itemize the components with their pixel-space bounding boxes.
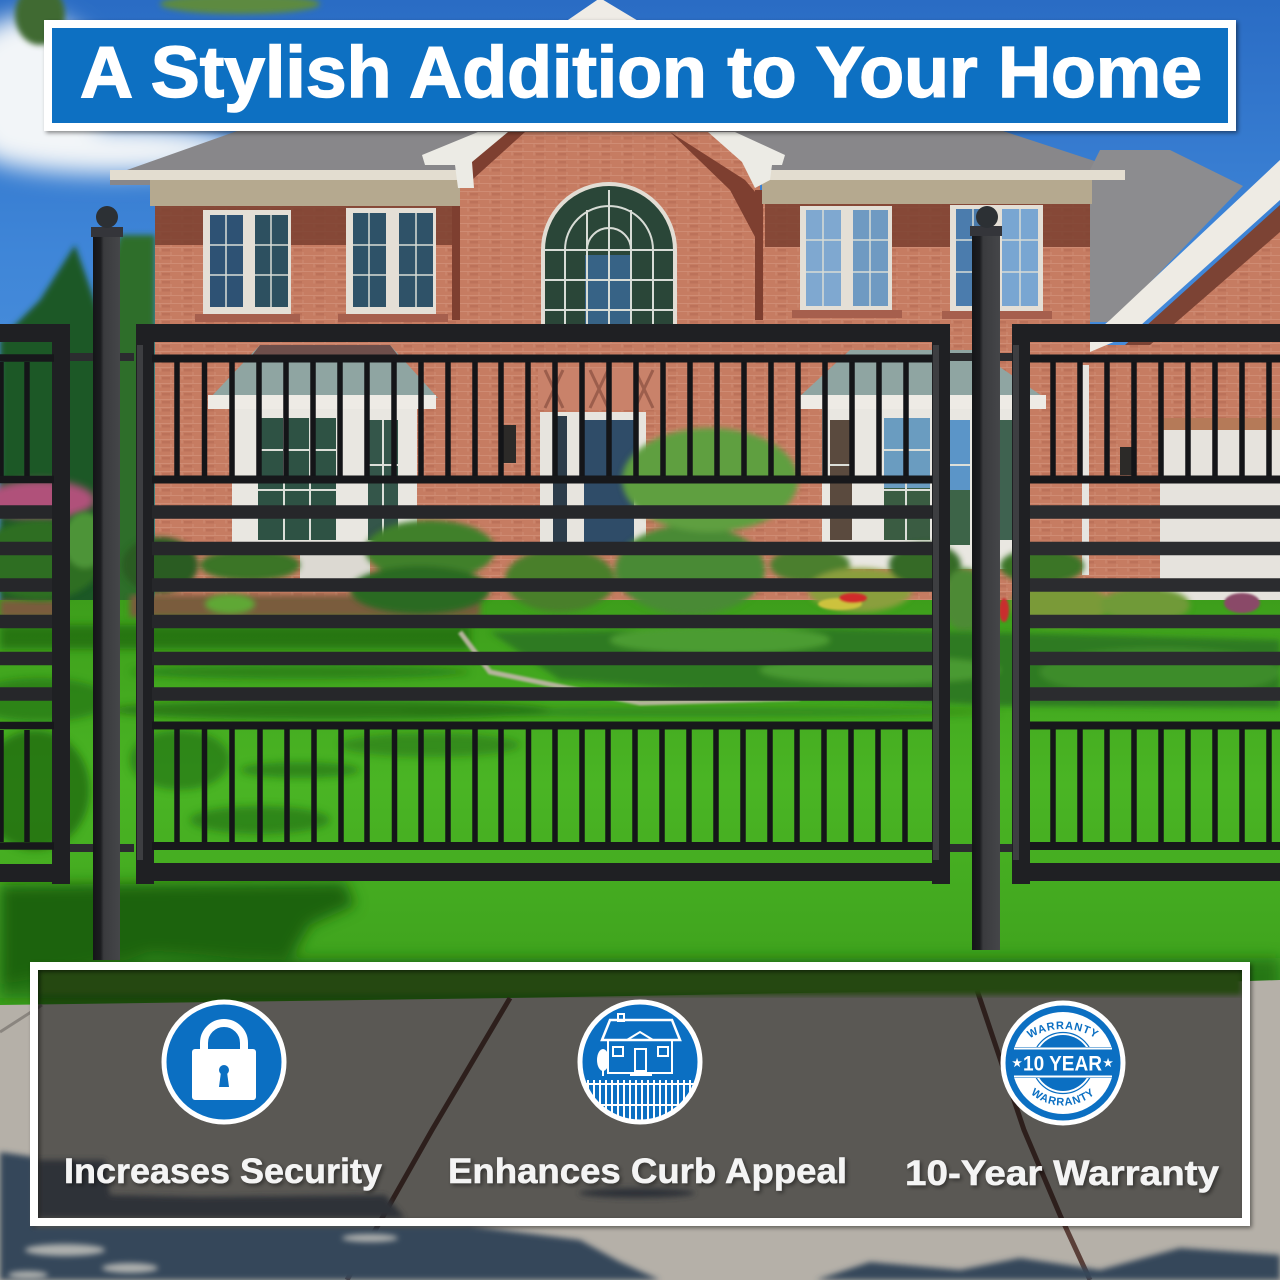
tree shadows on sidewalk bbox=[0, 1152, 1280, 1280]
benefit: enhances curb appeal bbox=[448, 1002, 847, 1191]
frame highlight bbox=[140, 345, 936, 860]
sidewalk bbox=[0, 980, 1280, 1280]
benefit: increases security bbox=[64, 1002, 383, 1191]
fence section: left panel bbox=[0, 324, 62, 884]
top pickets bbox=[177, 362, 906, 476]
icon: warranty badge: 10 YEAR bbox=[1023, 1052, 1102, 1076]
lawn shade patches bbox=[0, 625, 1000, 850]
panel tree shadow bbox=[38, 1160, 695, 1218]
frame bbox=[145, 324, 941, 884]
icon: warranty badge: ★ bbox=[1103, 1058, 1113, 1070]
left bay window bbox=[208, 345, 438, 549]
icon: warranty badge: WARRANTY bbox=[1026, 1022, 1099, 1038]
horizontal bars bbox=[152, 512, 932, 694]
lawn bbox=[0, 600, 1280, 1010]
shrubs bbox=[0, 428, 1190, 632]
clouds bbox=[0, 15, 240, 174]
fence post: left bbox=[91, 206, 123, 960]
brick herringbone band and lintel bbox=[538, 368, 668, 410]
right gable white trim bbox=[1080, 160, 1280, 352]
main roof bbox=[110, 130, 1128, 185]
fence connectors between posts and panels bbox=[70, 357, 1012, 848]
garage door bbox=[1160, 418, 1280, 602]
icon: house and fence bbox=[580, 1002, 700, 1122]
label: Increases Security bbox=[64, 1152, 383, 1191]
gable shadows bbox=[452, 132, 763, 320]
icon: warranty badge bbox=[1000, 1000, 1126, 1126]
icon: padlock bbox=[164, 1002, 284, 1122]
fence section: right panel bbox=[1016, 324, 1280, 884]
top rails bbox=[152, 358, 932, 846]
title banner bbox=[48, 24, 1232, 127]
porch base bbox=[300, 555, 370, 580]
house brick wall bbox=[155, 200, 1090, 610]
panel background bbox=[34, 966, 1246, 1222]
under-eave shade bbox=[155, 203, 1090, 247]
front door bbox=[540, 412, 646, 547]
gable eave shadow bbox=[1125, 205, 1280, 345]
benefit: 10-year warranty bbox=[905, 1000, 1222, 1196]
distant trees bbox=[0, 0, 320, 620]
wall lanterns bbox=[503, 425, 1133, 475]
right brick gable wall bbox=[1090, 215, 1280, 610]
pink shrub at left bbox=[0, 480, 95, 520]
window sills bbox=[195, 310, 1052, 322]
benefits panel bbox=[30, 962, 1254, 1230]
sidewalk cracks bbox=[347, 990, 1090, 1280]
fence section: main panel bbox=[140, 324, 941, 884]
icon: warranty badge: WARRANTY bbox=[1032, 1088, 1092, 1106]
upper gable peak bbox=[565, 0, 640, 22]
flower accents bbox=[818, 593, 1260, 622]
mulch beds bbox=[0, 595, 480, 618]
fence post: right bbox=[970, 206, 1002, 950]
sunlit flecks in the shadow bbox=[8, 1234, 398, 1279]
panel border bbox=[34, 966, 1246, 1222]
title: A Stylish Addition to Your Home bbox=[80, 33, 1202, 113]
right bay window bbox=[798, 350, 1046, 569]
right roof bbox=[1060, 150, 1243, 322]
gable white brackets bbox=[422, 132, 785, 188]
sky bbox=[0, 0, 1280, 640]
label: Enhances Curb Appeal bbox=[448, 1152, 847, 1191]
label: 10-Year Warranty bbox=[905, 1154, 1220, 1193]
garden bed bbox=[490, 626, 1280, 708]
gutter bbox=[1082, 365, 1089, 575]
grass strip over the walk bbox=[38, 968, 1242, 995]
foreground tree shadow on lawn bbox=[0, 882, 1280, 998]
icon: warranty badge: ★ bbox=[1012, 1058, 1022, 1070]
central brick gable bbox=[460, 132, 760, 560]
garden path edge bbox=[460, 632, 800, 703]
sidewalk edge at left bbox=[0, 1005, 42, 1032]
upper windows bbox=[203, 205, 1043, 314]
arched window bbox=[543, 184, 675, 326]
bottom pickets bbox=[177, 729, 905, 842]
eaves bbox=[110, 170, 1125, 206]
